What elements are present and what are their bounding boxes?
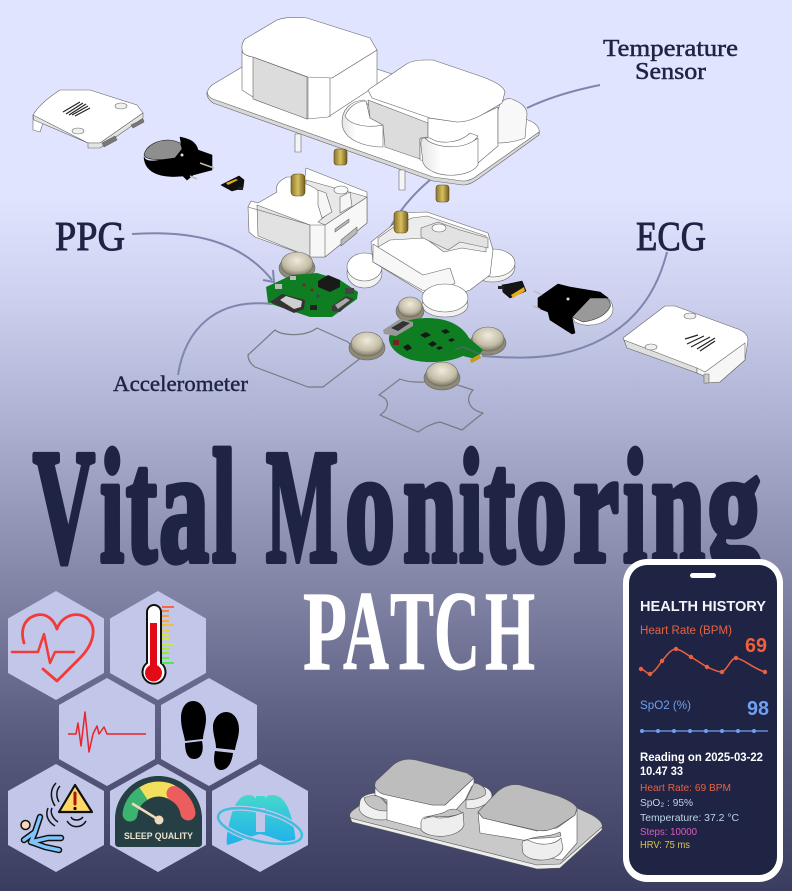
right socket xyxy=(347,211,515,317)
subtitle: H xyxy=(485,569,535,694)
reading details: HRV: 75 ms xyxy=(640,840,690,851)
hexagon: fall detection xyxy=(8,764,104,872)
left connector xyxy=(221,176,244,191)
reading details: Steps: 10000 xyxy=(640,827,697,838)
snap dome electrodes xyxy=(279,252,506,390)
title: V xyxy=(33,418,95,597)
title: i xyxy=(623,418,647,597)
label: ECG: ECG xyxy=(636,213,706,259)
label: temperature sensor: Temperature xyxy=(603,36,738,62)
label: temperature sensor: Sensor xyxy=(635,59,706,85)
phone screen xyxy=(629,565,777,875)
connector line: PPG xyxy=(132,233,272,280)
left socket xyxy=(248,168,367,257)
phone mockup xyxy=(623,559,783,882)
PPG circuit board xyxy=(266,273,358,317)
title: a xyxy=(159,418,209,597)
label: PPG: PPG xyxy=(55,213,125,259)
top housing xyxy=(207,17,539,202)
title: g xyxy=(707,418,761,597)
hexagon icon panel xyxy=(8,591,308,872)
label: accelerometer: Accelerometer xyxy=(113,371,249,396)
reading details: SpO₂ : 95% xyxy=(640,797,693,809)
connector line: temperature sensor to socket xyxy=(388,180,430,232)
label: SpO2: SpO2 (%) xyxy=(640,698,691,712)
reading details: Temperature: 37.2 °C xyxy=(640,812,739,824)
reading details: Heart Rate: 69 BPM xyxy=(640,782,731,794)
reading details xyxy=(640,752,763,851)
title: o xyxy=(345,418,395,597)
subtitle xyxy=(303,569,535,694)
title: o xyxy=(516,418,567,597)
exploded view of the patch xyxy=(33,17,748,432)
subtitle: C xyxy=(434,569,480,694)
title: r xyxy=(573,418,619,597)
screw posts xyxy=(295,134,449,202)
phone notch xyxy=(690,573,716,578)
left coin battery and holder xyxy=(144,137,214,180)
left gasket outline xyxy=(248,328,362,387)
title: n xyxy=(651,418,705,597)
phone frame xyxy=(623,559,783,882)
right cover xyxy=(623,306,748,383)
heading: health history: HEALTH HISTORY xyxy=(640,598,766,615)
finished patch render xyxy=(350,759,602,869)
right coin battery and holder xyxy=(533,284,613,334)
label: heart rate: Heart Rate (BPM) xyxy=(640,625,732,637)
hexagon: lungs xyxy=(212,764,308,872)
subtitle: T xyxy=(390,569,434,694)
title: M xyxy=(266,418,338,597)
reading details: 10.47 33 xyxy=(640,766,683,778)
hexagon: temperature xyxy=(110,591,206,700)
arrow head: PPG xyxy=(263,270,274,282)
subtitle: A xyxy=(343,569,389,694)
hexagon: ECG trace xyxy=(59,678,155,786)
right connector xyxy=(498,281,526,298)
value: heart rate: 69 xyxy=(745,635,767,657)
title: t xyxy=(484,418,515,597)
title: n xyxy=(403,418,457,597)
hexagon: sleep quality: SLEEP QUALITY xyxy=(124,831,193,841)
title xyxy=(33,418,761,597)
chart: SpO2 xyxy=(640,729,768,733)
left cover xyxy=(33,90,144,148)
hexagon: heart rate xyxy=(8,591,104,700)
connector line: temperature sensor xyxy=(527,85,600,108)
title: i xyxy=(459,418,483,597)
value: SpO2: 98 xyxy=(747,698,769,720)
chart: heart rate xyxy=(639,647,767,676)
hexagon: sleep quality xyxy=(110,764,206,872)
title: i xyxy=(100,418,124,597)
ECG circuit board xyxy=(383,318,483,363)
connector line: ECG xyxy=(482,252,667,358)
reading details: Reading on 2025-03-22 xyxy=(640,752,763,764)
title: t xyxy=(126,418,157,597)
subtitle: P xyxy=(303,569,347,694)
hexagon: steps xyxy=(161,678,257,786)
connector line: accelerometer xyxy=(178,303,272,375)
right gasket outline xyxy=(379,379,483,432)
title: l xyxy=(212,418,236,597)
